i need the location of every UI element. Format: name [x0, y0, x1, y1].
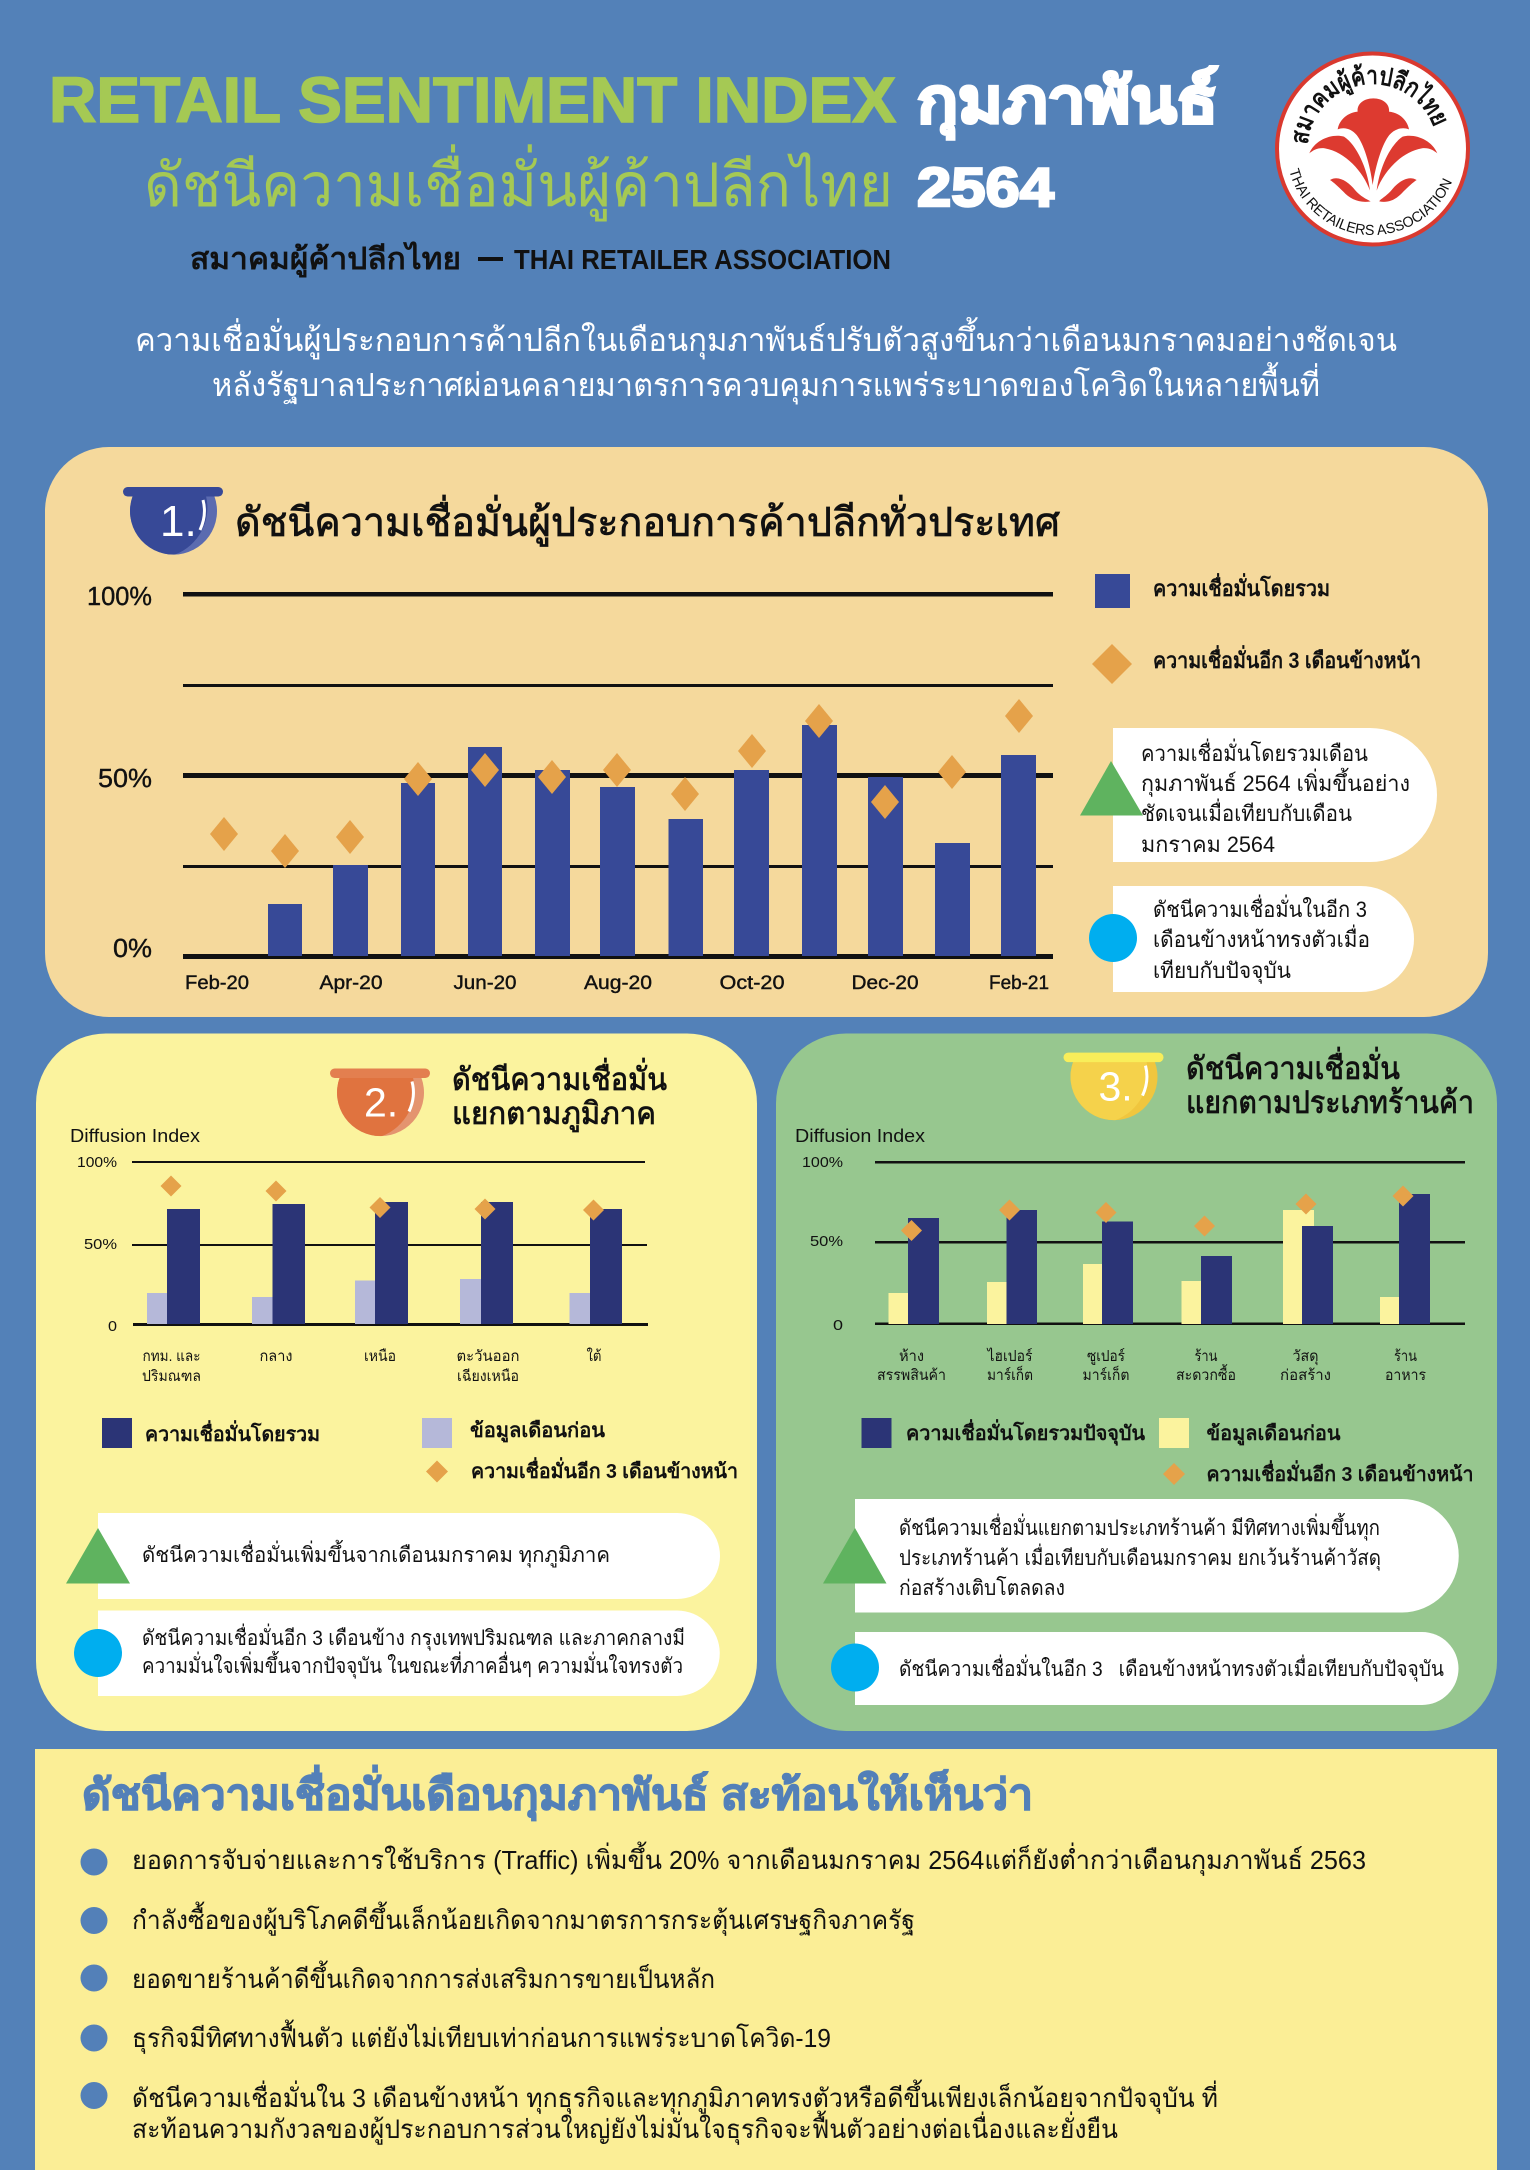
bar chart: national index: Apr-20	[320, 973, 382, 994]
panel: national retail confidence	[45, 447, 1488, 1017]
callout: regional outlook: ดัชนีความเชื่อมั่นอีก 3 เดือนข้าง กรุงเทพปริมณฑล และภาคกลางมี	[142, 1623, 685, 1651]
bar chart: store type: 50%	[810, 1233, 843, 1250]
callout: store types up	[823, 1499, 1459, 1612]
callout: store types up: ก่อสร้างเติบโตลดลง	[899, 1576, 1065, 1600]
icon: number 1 bowl: 1.	[160, 497, 197, 546]
title: year: 2564	[917, 156, 1054, 218]
bar chart: store type: อาหาร	[1385, 1367, 1426, 1384]
callout: all regions up	[66, 1513, 720, 1599]
title: month: กุมภาพันธ์	[917, 66, 1218, 139]
bar chart: region: ใต้	[586, 1347, 602, 1365]
callout: all regions up: ดัชนีความเชื่อมั่นเพิ่มขึ้นจากเดือนมกราคม ทุกภูมิภาค	[142, 1540, 610, 1568]
icon: Thai Retailers Association logo	[1275, 52, 1470, 246]
bar chart: national index: 50%	[98, 763, 152, 793]
heading: panel 2	[452, 1058, 667, 1132]
heading: panel 1: ดัชนีความเชื่อมั่นผู้ประกอบการค้าปลีกทั่วประเทศ	[235, 495, 1060, 546]
bar chart: store type: ร้าน	[1194, 1348, 1218, 1365]
callout: three-month outlook steady: เดือนข้างหน้าทรงตัวเมื่อ	[1153, 924, 1370, 952]
bar chart: national index: Aug-20	[584, 973, 652, 994]
bullet list: ธุรกิจมีทิศทางฟื้นตัว แต่ยังไม่เทียบเท่าก่อนการแพร่ระบาดโควิด-19	[132, 2019, 831, 2054]
legend: region: ข้อมูลเดือนก่อน	[470, 1419, 605, 1444]
callout: regional outlook: ความมั่นใจเพิ่มขึ้นจากปัจจุบัน ในขณะที่ภาคอื่นๆ ความมั่นใจทรงตัว	[142, 1651, 683, 1679]
bar chart: region: กทม. และ	[142, 1348, 200, 1365]
icon: Thai Retailers Association logo: สมาคมผู้ค้าปลีกไทย	[1294, 63, 1447, 143]
bar chart: national index: 100%	[87, 581, 152, 611]
bar chart: store type: สรรพสินค้า	[877, 1367, 946, 1384]
bar chart: region: เฉียงเหนือ	[457, 1368, 519, 1385]
bar chart: national index: Oct-20	[720, 973, 784, 994]
bar chart: store type: ซูเปอร์	[1087, 1348, 1125, 1365]
icon: number 2 bowl: 2.	[364, 1080, 398, 1126]
heading: panel 3: แยกตามประเภทร้านค้า	[1186, 1085, 1474, 1120]
bullet list: ยอดการจับจ่ายและการใช้บริการ (Traffic) เพิ่มขึ้น 20% จากเดือนมกราคม 2564แต่ก็ยังต่ำกว่าเดือนกุมภาพันธ์ 2563	[132, 1841, 1366, 1876]
heading: panel 3: ดัชนีความเชื่อมั่น	[1186, 1047, 1400, 1086]
bar chart: national index	[87, 581, 1053, 994]
bar chart: region: Diffusion Index	[70, 1126, 200, 1146]
bar chart: store type: 100%	[802, 1154, 843, 1171]
bar chart: region: เหนือ	[364, 1348, 396, 1365]
bar chart: region	[70, 1126, 648, 1385]
callout: store outlook	[831, 1632, 1458, 1705]
subtitle: Thai index name: ดัชนีความเชื่อมั่นผู้ค้าปลีกไทย	[144, 144, 893, 222]
legend: national index	[1092, 572, 1421, 684]
bar chart: region: ปริมณฑล	[142, 1368, 201, 1385]
callout: store types up: ประเภทร้านค้า เมื่อเทียบกับเดือนมกราคม ยกเว้นร้านค้าวัสดุ	[899, 1543, 1381, 1571]
heading: panel 2: ดัชนีความเชื่อมั่น	[452, 1058, 667, 1097]
bar chart: store type: ไฮเปอร์	[987, 1347, 1032, 1365]
bar chart: store type: มาร์เก็ต	[987, 1365, 1033, 1384]
legend: region: ความเชื่อมั่นอีก 3 เดือนข้างหน้า	[471, 1456, 738, 1483]
bullet list: กำลังซื้อของผู้บริโภคดีขึ้นเล็กน้อยเกิดจากมาตรการกระตุ้นเศรษฐกิจภาครัฐ	[132, 1901, 915, 1936]
bar chart: store type: Diffusion Index	[795, 1126, 925, 1146]
heading: takeaways: ดัชนีความเชื่อมั่นเดือนกุมภาพันธ์ สะท้อนให้เห็นว่า	[82, 1765, 1033, 1821]
bullet list: สะท้อนความกังวลของผู้ประกอบการส่วนใหญ่ยังไม่มั่นใจธุรกิจจะฟื้นตัวอย่างต่อเนื่องและยั่งยืน	[132, 2110, 1118, 2145]
callout: regional outlook	[74, 1610, 720, 1696]
bar chart: national index: Feb-21	[989, 973, 1049, 994]
legend: region	[102, 1418, 738, 1483]
bar chart: store type: ห้าง	[899, 1348, 924, 1365]
association name English: THAI RETAILER ASSOCIATION	[514, 244, 891, 275]
heading: panel 2: แยกตามภูมิภาค	[452, 1096, 656, 1132]
callout: overall confidence up	[1080, 728, 1437, 862]
panel: key takeaways	[35, 1749, 1497, 2170]
icon: number 1 bowl	[123, 487, 223, 555]
bar chart: store type: สะดวกซื้อ	[1176, 1364, 1236, 1384]
callout: overall confidence up: กุมภาพันธ์ 2564 เพิ่มขึ้นอย่าง	[1141, 768, 1410, 797]
legend: national index: ความเชื่อมั่นอีก 3 เดือนข้างหน้า	[1153, 644, 1421, 673]
icon: number 3 bowl	[1064, 1053, 1164, 1120]
panel: index by region	[36, 1034, 757, 1731]
intro text: ความเชื่อมั่นผู้ประกอบการค้าปลีกในเดือนกุมภาพันธ์ปรับตัวสูงขึ้นกว่าเดือนมกราคมอย่างชัดเจน	[135, 317, 1397, 360]
intro text	[135, 317, 1397, 405]
callout: store types up: ดัชนีความเชื่อมั่นแยกตามประเภทร้านค้า มีทิศทางเพิ่มขึ้นทุก	[899, 1513, 1380, 1541]
heading: panel 3	[1186, 1047, 1474, 1120]
legend: store type: ความเชื่อมั่นโดยรวมปัจจุบัน	[906, 1418, 1145, 1446]
bar chart: region: 50%	[84, 1236, 117, 1253]
icon: number 2 bowl	[330, 1068, 430, 1136]
legend: store type	[862, 1418, 1474, 1486]
callout: overall confidence up: มกราคม 2564	[1141, 832, 1275, 857]
icon: Thai Retailers Association logo: THAI RETAILERS ASSOCIATION	[1290, 168, 1452, 235]
title: Retail Sentiment Index: RETAIL SENTIMENT INDEX	[49, 64, 896, 136]
bar chart: national index: Jun-20	[454, 973, 516, 994]
association name Thai: สมาคมผู้ค้าปลีกไทย	[190, 241, 461, 278]
bar chart: region: 0	[108, 1318, 117, 1335]
bar chart: store type: วัสดุ	[1292, 1348, 1318, 1366]
bullet list	[80, 1841, 1366, 2145]
legend: store type: ข้อมูลเดือนก่อน	[1206, 1422, 1341, 1447]
legend: region: ความเชื่อมั่นโดยรวม	[145, 1419, 320, 1446]
callout: overall confidence up: ชัดเจนเมื่อเทียบกับเดือน	[1141, 798, 1352, 826]
callout: overall confidence up: ความเชื่อมั่นโดยรวมเดือน	[1141, 738, 1368, 766]
callout: three-month outlook steady	[1089, 886, 1414, 992]
bar chart: region: ตะวันออก	[456, 1348, 520, 1365]
intro text: หลังรัฐบาลประกาศผ่อนคลายมาตรการควบคุมการแพร่ระบาดของโควิดในหลายพื้นที่	[212, 362, 1320, 405]
legend: national index: ความเชื่อมั่นโดยรวม	[1153, 572, 1330, 601]
bar chart: region: กลาง	[260, 1348, 292, 1365]
panel: index by store type	[776, 1034, 1497, 1731]
bar chart: store type: ก่อสร้าง	[1280, 1367, 1331, 1384]
bullet list: ยอดขายร้านค้าดีขึ้นเกิดจากการส่งเสริมการขายเป็นหลัก	[132, 1960, 715, 1994]
dash	[478, 257, 503, 261]
bar chart: region: 100%	[77, 1154, 117, 1171]
bar chart: national index: Dec-20	[852, 973, 918, 994]
icon: number 3 bowl: 3.	[1098, 1064, 1133, 1110]
bar chart: store type: 0	[833, 1317, 843, 1334]
bar chart: national index: Feb-20	[185, 973, 249, 994]
bar chart: store type: ร้าน	[1394, 1348, 1417, 1365]
callout: three-month outlook steady: ดัชนีความเชื่อมั่นในอีก 3	[1153, 894, 1367, 922]
legend: store type: ความเชื่อมั่นอีก 3 เดือนข้างหน้า	[1206, 1459, 1474, 1486]
callout: store outlook: ดัชนีความเชื่อมั่นในอีก 3 เดือนข้างหน้าทรงตัวเมื่อเทียบกับปัจจุบัน	[899, 1654, 1444, 1682]
bar chart: store type: มาร์เก็ต	[1082, 1365, 1130, 1384]
callout: three-month outlook steady: เทียบกับปัจจุบัน	[1153, 958, 1291, 984]
header title block	[49, 64, 1218, 278]
bar chart: national index: 0%	[113, 933, 152, 963]
bullet list: ดัชนีความเชื่อมั่นใน 3 เดือนข้างหน้า ทุกธุรกิจและทุกภูมิภาคทรงตัวหรือดีขึ้นเพียงเล็กน้อยจากปัจจุบัน ที่	[132, 2079, 1218, 2114]
bar chart: store type	[795, 1126, 1465, 1384]
